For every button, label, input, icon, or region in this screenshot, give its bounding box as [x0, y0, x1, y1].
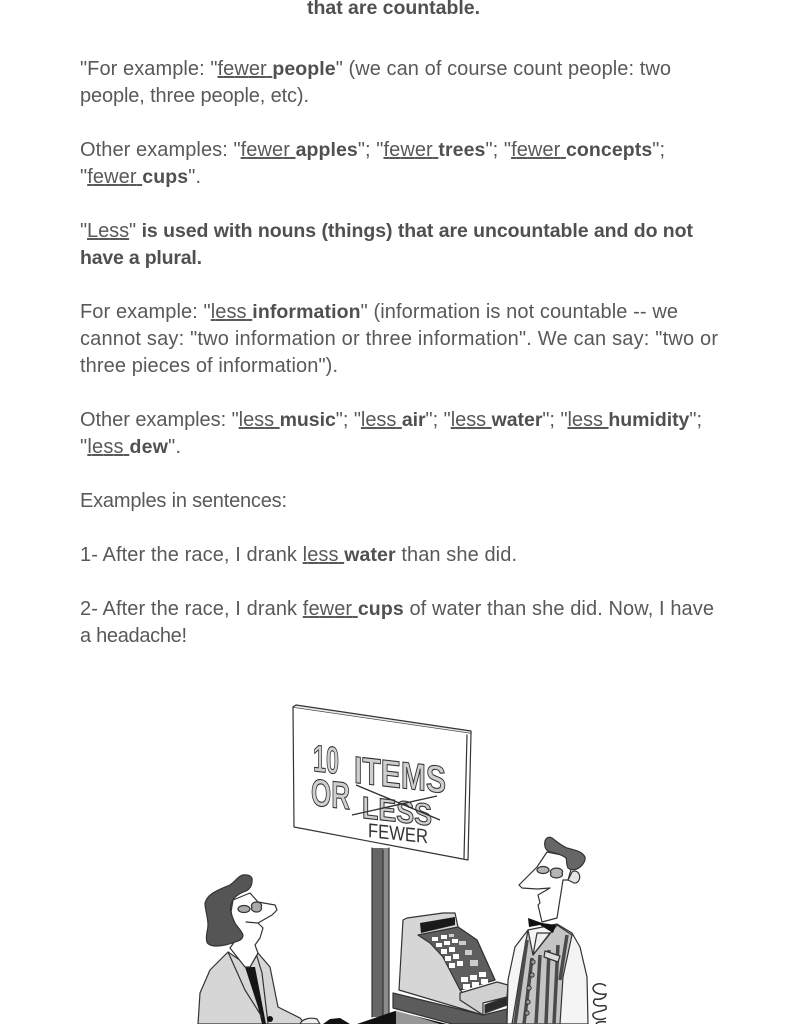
hand	[300, 1018, 320, 1024]
sign text: 10 items	[313, 737, 446, 802]
signature	[593, 984, 606, 1024]
text block: less rule: have a plural.	[80, 247, 202, 269]
cross-out strokes	[352, 785, 440, 820]
text block: fewer example	[80, 58, 671, 107]
hair	[545, 837, 585, 870]
shirt collar	[533, 933, 550, 955]
text block: less example: For example: "less information" (information is not countable -- we	[80, 301, 678, 323]
text block: less example: three pieces of information").	[80, 355, 338, 377]
cartoon illustration	[198, 705, 606, 1024]
neck and head	[519, 852, 572, 922]
vest pocket	[544, 951, 560, 962]
woman	[198, 875, 320, 1024]
mouth line	[246, 922, 258, 923]
text block: other fewer examples	[80, 139, 665, 188]
register window	[420, 917, 455, 933]
sign board	[293, 705, 471, 860]
jacket	[198, 952, 305, 1024]
button	[267, 1016, 273, 1022]
glasses	[537, 867, 562, 878]
text block: less rule	[80, 220, 694, 269]
register base	[393, 993, 507, 1024]
cash register	[393, 913, 508, 1024]
bow tie	[528, 918, 556, 933]
sign text: or less: LESS	[362, 790, 432, 833]
sign text: or less: OR	[311, 771, 350, 818]
text block: less example: cannot say: "two information or three information". We can say: "two or	[80, 328, 718, 350]
text block: examples intro: Examples in sentences:	[80, 490, 287, 512]
signpost	[372, 848, 389, 1017]
text block: sentence 1: 1- After the race, I drank less water than she did.	[80, 544, 517, 566]
text block: fewer example: people, three people, etc).	[80, 85, 309, 107]
text block: less example	[80, 301, 718, 377]
text block: other fewer examples: Other examples: "fewer apples"; "fewer trees"; "fewer concepts";	[80, 139, 665, 161]
coat	[507, 924, 588, 1024]
text block: sentence 2: a headache!	[80, 625, 187, 647]
text block: other less examples	[80, 409, 702, 458]
glasses	[238, 902, 262, 912]
sign text: or less	[311, 771, 432, 833]
counter	[323, 1011, 447, 1024]
text block: other fewer examples: "fewer cups".	[80, 166, 201, 188]
hair	[205, 875, 252, 946]
register top slab	[460, 982, 508, 1015]
text block: other less examples: "less dew".	[80, 436, 181, 458]
text block: fewer example: "For example: "fewer people" (we can of course count people: two	[80, 58, 671, 80]
register keypad	[418, 927, 495, 990]
text block: sentence 2	[80, 598, 714, 647]
man	[507, 837, 588, 1024]
register body	[399, 913, 495, 1015]
text block: less rule: "Less" is used with nouns (things) that are uncountable and do not	[80, 220, 694, 242]
neck and face	[230, 893, 277, 967]
vest buttons	[525, 960, 535, 1015]
sign text: 10 items: 10	[313, 737, 339, 783]
drawer	[485, 997, 507, 1013]
vest stripes	[515, 935, 567, 1024]
sign text: fewer: FEWER	[368, 820, 428, 848]
register keys	[432, 934, 488, 989]
ear	[568, 871, 580, 883]
shirt	[245, 967, 266, 1024]
sign text: 10 items: ITEMS	[354, 749, 446, 802]
text block: sentence 2: 2- After the race, I drank fewer cups of water than she did. Now, I have	[80, 598, 714, 620]
text block: other less examples: Other examples: "less music"; "less air"; "less water"; "less humidity";	[80, 409, 702, 431]
vest with stripes	[512, 925, 572, 1024]
